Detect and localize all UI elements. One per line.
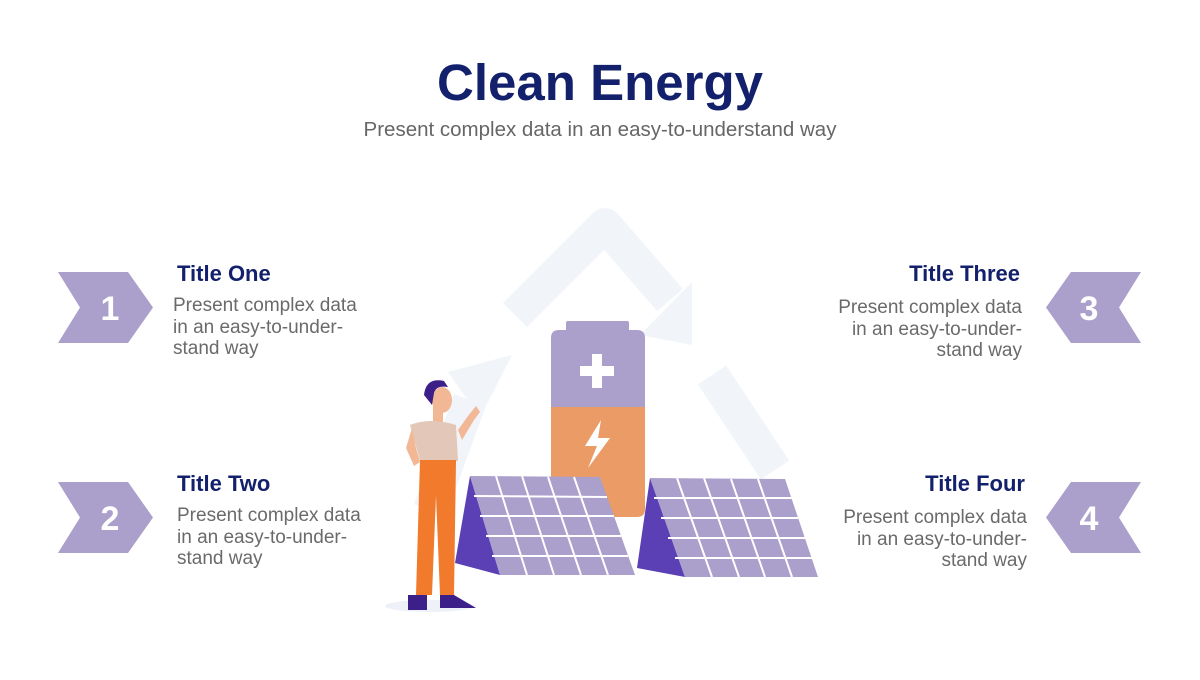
item 2 text: stand way <box>177 548 263 569</box>
item 2 text: Title Two <box>177 471 270 496</box>
item 4 text: stand way <box>941 550 1027 571</box>
item 1 text <box>173 261 357 359</box>
subtitle: Present complex data in an easy-to-understand way <box>364 118 836 141</box>
item 2 text: Present complex data <box>177 505 361 526</box>
chevron 2 <box>58 482 153 553</box>
item 4 text: Title Four <box>925 471 1025 496</box>
person <box>385 380 480 612</box>
item 1 text: in an easy-to-under- <box>173 316 343 338</box>
item 2 text: in an easy-to-under- <box>177 526 347 548</box>
item 1 text: Title One <box>177 261 271 286</box>
item 4 text: Present complex data <box>843 507 1027 528</box>
title: Clean Energy <box>437 54 763 111</box>
item 1 text: Present complex data <box>173 295 357 316</box>
item 4 text <box>843 471 1027 571</box>
chevron 2: 2 <box>101 500 119 538</box>
item 3 text <box>838 261 1022 361</box>
chevron 1 <box>58 272 153 343</box>
chevron 3 <box>1046 272 1141 343</box>
chevron 3: 3 <box>1080 290 1098 328</box>
item 2 text <box>177 471 361 569</box>
chevron 4 <box>1046 482 1141 553</box>
item 3 text: in an easy-to-under- <box>852 318 1022 340</box>
recycle arrows <box>430 225 775 510</box>
item 3 text: Present complex data <box>838 297 1022 318</box>
chevron 4: 4 <box>1080 500 1099 538</box>
chevron 1: 1 <box>101 290 119 328</box>
item 3 text: Title Three <box>909 261 1020 286</box>
item 1 text: stand way <box>173 338 259 359</box>
item 4 text: in an easy-to-under- <box>857 528 1027 550</box>
solar panel left <box>455 476 635 575</box>
item 3 text: stand way <box>936 340 1022 361</box>
battery <box>551 321 645 517</box>
solar panel right <box>637 478 818 577</box>
